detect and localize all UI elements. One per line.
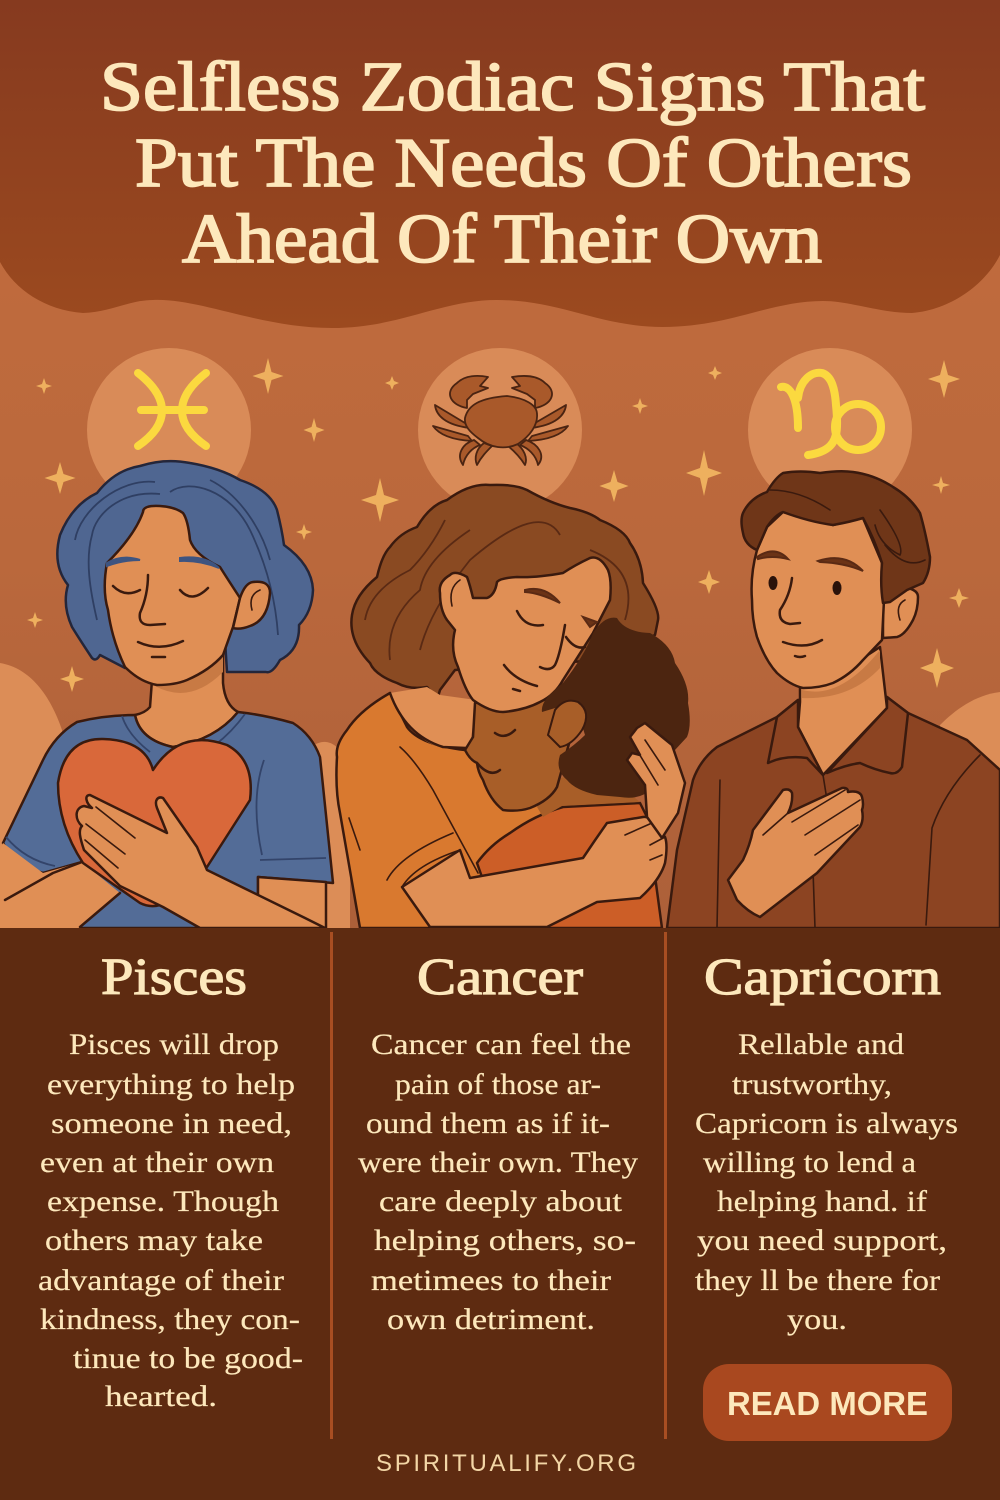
Capricorn description: willing to lend a	[703, 1146, 916, 1179]
sign names: Pisces	[101, 949, 247, 1006]
bottom panel	[0, 928, 1000, 1500]
Capricorn description: helping hand. if	[717, 1185, 927, 1218]
Pisces description: others may take	[45, 1224, 263, 1257]
title banner	[0, 0, 1000, 328]
Pisces description: Pisces will drop	[69, 1028, 279, 1061]
figure: Cancer mother and child	[336, 485, 690, 928]
ear	[233, 582, 270, 629]
hair	[742, 471, 930, 603]
Cancer description: care deeply about	[379, 1185, 623, 1218]
Pisces description: everything to help	[47, 1068, 295, 1101]
eyes, brows, nose, mouth	[768, 576, 842, 595]
t-shirt	[3, 712, 333, 928]
Pisces description: even at their own	[40, 1146, 274, 1179]
neck	[135, 650, 238, 747]
hair	[57, 461, 313, 672]
column dividers	[330, 932, 667, 1439]
Pisces description: advantage of their	[38, 1264, 284, 1297]
Cancer description: Cancer can feel the	[371, 1028, 631, 1061]
Capricorn description: Rellable and	[738, 1028, 904, 1061]
icon: crab	[433, 376, 568, 465]
footer website: SPIRITUALIFY.ORG	[376, 1450, 636, 1477]
heart	[58, 739, 251, 906]
Cancer description: pain of those ar-	[395, 1068, 601, 1101]
Capricorn description: Capricorn is always	[695, 1107, 958, 1140]
illustration background	[0, 0, 1000, 930]
child neck	[537, 770, 640, 817]
Capricorn description: they ll be there for	[695, 1264, 940, 1297]
mother face	[440, 558, 611, 712]
child's-side hand on head	[627, 723, 685, 838]
child hair	[542, 618, 690, 798]
hand	[728, 788, 863, 917]
face	[752, 512, 884, 688]
sparkles	[27, 358, 969, 692]
child shirt	[477, 803, 662, 928]
Capricorn description: trustworthy,	[732, 1068, 892, 1101]
child ear	[548, 701, 586, 747]
Pisces description: hearted.	[105, 1380, 217, 1413]
title	[100, 49, 926, 278]
Cancer description	[358, 1028, 638, 1336]
Pisces description: kindness, they con-	[40, 1303, 300, 1336]
sign names: Cancer	[417, 949, 583, 1006]
mother neck	[390, 687, 476, 747]
Pisces description: expense. Though	[47, 1185, 279, 1218]
lower hills	[0, 663, 1000, 930]
Cancer description: helping others, so-	[374, 1224, 636, 1257]
title: Ahead Of Their Own	[182, 201, 822, 278]
brows	[107, 557, 219, 568]
right upper arm	[258, 877, 326, 928]
Pisces description	[38, 1028, 303, 1413]
mother arm and hand	[402, 817, 666, 927]
sign names	[101, 949, 941, 1006]
Pisces description: someone in need,	[51, 1107, 292, 1140]
eyes and mouth	[113, 575, 208, 657]
Pisces description: tinue to be good-	[73, 1342, 303, 1375]
zodiac halos	[87, 348, 912, 512]
Capricorn description: you.	[787, 1303, 847, 1336]
Cancer description: ound them as if it-	[366, 1107, 610, 1140]
mother hair	[351, 485, 658, 700]
face	[105, 506, 240, 685]
title: Put The Needs Of Others	[135, 125, 912, 202]
shirt body	[667, 697, 1000, 928]
Capricorn description	[695, 1028, 958, 1336]
icon: Pisces symbol	[138, 373, 206, 446]
figure: Pisces person	[0, 461, 333, 928]
read more button	[703, 1364, 952, 1441]
neckline	[390, 693, 466, 748]
ear	[883, 588, 918, 638]
Cancer description: own detriment.	[387, 1303, 595, 1336]
read more button: READ MORE	[727, 1385, 928, 1422]
hair strands	[75, 480, 278, 635]
icon: Capricorn symbol	[781, 373, 881, 455]
shirt creases	[349, 747, 478, 887]
Cancer description: metimees to their	[371, 1264, 611, 1297]
collar left	[768, 700, 823, 775]
hair strands	[365, 520, 628, 660]
neck	[798, 647, 887, 775]
hand and forearm	[77, 795, 325, 928]
mother eyes and mouth	[504, 611, 585, 691]
sign names: Capricorn	[704, 949, 941, 1006]
title: Selfless Zodiac Signs That	[100, 49, 926, 126]
left arm	[0, 843, 120, 928]
collar right	[827, 697, 908, 773]
child face	[465, 690, 575, 811]
Capricorn description: you need support,	[697, 1224, 947, 1257]
figure: Capricorn person	[667, 471, 1000, 928]
mother shirt	[336, 693, 560, 928]
Cancer description: were their own. They	[358, 1146, 638, 1179]
